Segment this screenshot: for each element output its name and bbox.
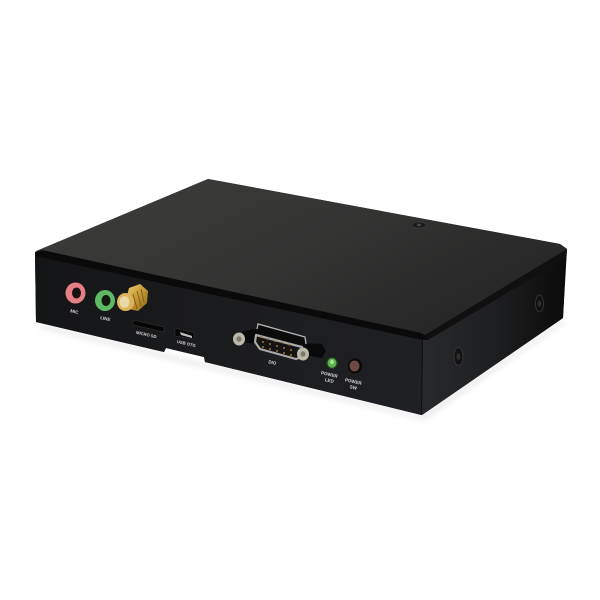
body silhouette xyxy=(35,179,567,415)
side ridge shadow xyxy=(426,249,567,343)
side screw right xyxy=(536,295,544,312)
top panel xyxy=(36,179,567,337)
front panel xyxy=(35,256,422,415)
ground shadow xyxy=(40,320,564,420)
port: DIO D-sub connector xyxy=(233,324,326,366)
port: micro SD slot: MICRO SD xyxy=(136,330,157,339)
port: LINE jack xyxy=(95,290,115,322)
side panel xyxy=(422,258,566,415)
indicator: power LED: POWER xyxy=(320,370,339,379)
top screw xyxy=(412,222,426,228)
indicator: power LED xyxy=(320,357,339,384)
indicator: power LED: LED xyxy=(324,377,335,384)
button: power switch: SW xyxy=(349,384,358,391)
port: micro SD slot xyxy=(133,320,164,339)
port: USB OTG xyxy=(175,328,196,348)
port: LINE jack: LINE xyxy=(100,315,111,322)
side screw left xyxy=(454,348,463,366)
port: USB OTG: USB OTG xyxy=(176,339,196,348)
port: MIC jack xyxy=(66,282,86,315)
port: DIO D-sub connector: DIO xyxy=(268,359,277,366)
button: power switch xyxy=(344,358,363,391)
device: media player box xyxy=(35,179,567,415)
port: SMA antenna connector xyxy=(117,284,148,311)
button: power switch: POWER xyxy=(344,377,363,386)
port: MIC jack: MIC xyxy=(70,308,80,315)
top edge shadow xyxy=(36,250,425,339)
